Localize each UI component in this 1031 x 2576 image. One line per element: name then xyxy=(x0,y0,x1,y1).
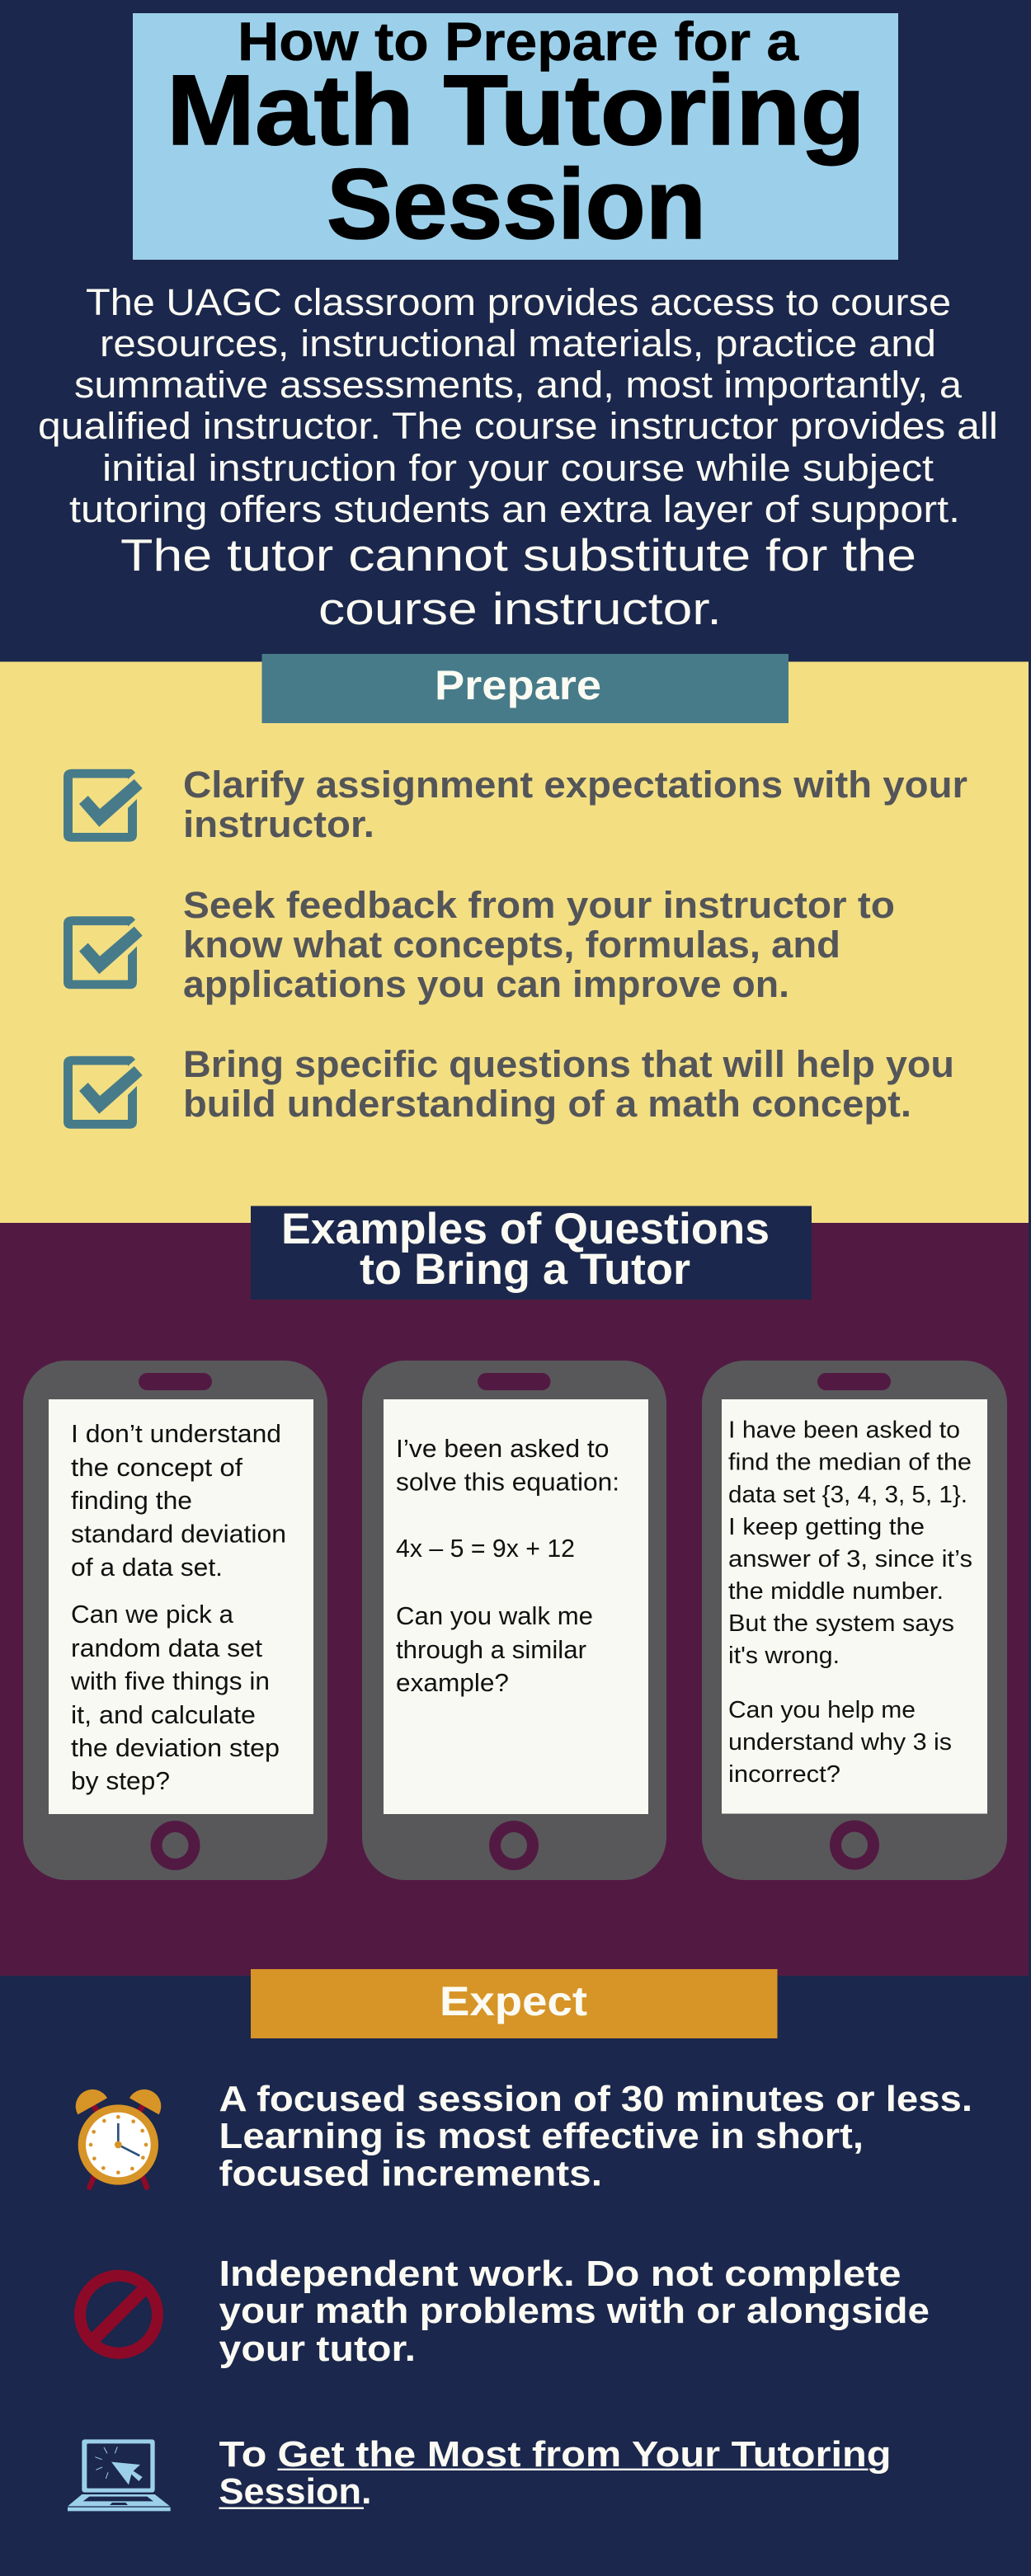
expect item 3 with link xyxy=(219,2434,891,2512)
title line 2: Math Tutoring xyxy=(167,54,865,166)
expect item 1: Learning is most effective in short, xyxy=(219,2116,864,2156)
intro paragraph: qualified instructor. The course instructor provides all xyxy=(38,405,998,447)
expect item 3 with link: Get the Most from Your Tutoring xyxy=(277,2434,891,2475)
expect item 2: your tutor. xyxy=(219,2329,416,2369)
prepare item 3: build understanding of a math concept. xyxy=(183,1083,911,1125)
phone 3 message: I have been asked to xyxy=(728,1417,960,1443)
phone 2 message: example? xyxy=(396,1668,509,1697)
intro paragraph: tutoring offers students an extra layer of support. xyxy=(69,488,960,530)
icon: checkbox 3 xyxy=(64,1056,143,1129)
expect heading: Expect xyxy=(440,1978,587,2024)
phone 3 message: But the system says xyxy=(728,1610,954,1637)
phone 1 message: of a data set. xyxy=(71,1553,223,1582)
phone 2 message: Can you walk me xyxy=(396,1601,593,1630)
phone 3 message: incorrect? xyxy=(728,1761,840,1788)
title line 3: Session xyxy=(327,148,706,260)
phone 3 message: the middle number. xyxy=(728,1578,944,1605)
phone 1 message: it, and calculate xyxy=(71,1700,256,1729)
phone 3 message: find the median of the xyxy=(728,1450,972,1476)
intro emphasis statement: course instructor. xyxy=(318,583,722,634)
phone 2 message: solve this equation: xyxy=(396,1468,619,1496)
prepare item 2: know what concepts, formulas, and xyxy=(183,924,840,966)
phone 3 xyxy=(702,1361,1007,1880)
phone 2 message: I’ve been asked to xyxy=(396,1434,609,1463)
icon: checkbox 1 xyxy=(64,769,143,842)
phone 1 message: the concept of xyxy=(71,1453,242,1482)
prepare item 1: instructor. xyxy=(183,803,374,845)
expect item 3 with link: To xyxy=(219,2434,267,2475)
prepare item 1: Clarify assignment expectations with your xyxy=(183,764,967,806)
phone 1 message xyxy=(70,1419,286,1795)
prepare item 2: applications you can improve on. xyxy=(183,963,789,1005)
prepare heading xyxy=(262,654,789,723)
phone 1 message: Can we pick a xyxy=(71,1600,234,1629)
panel: examples of questions xyxy=(0,1205,1029,1976)
intro emphasis statement xyxy=(120,529,916,634)
phone 1 message: finding the xyxy=(71,1486,192,1515)
icon: alarm clock xyxy=(76,2089,161,2188)
expect item 1: A focused session of 30 minutes or less. xyxy=(219,2079,972,2119)
icon: laptop with cursor xyxy=(68,2439,171,2511)
phone 1 message: I don’t understand xyxy=(71,1419,281,1448)
prepare item 3 xyxy=(183,1043,954,1125)
title line 1: How to Prepare for a xyxy=(238,11,799,72)
phone 2 message: through a similar xyxy=(396,1635,586,1664)
panel: prepare xyxy=(0,654,1029,1224)
phone 3 message: it's wrong. xyxy=(728,1643,840,1669)
prepare item 2: Seek feedback from your instructor to xyxy=(183,884,895,926)
phone 3 message xyxy=(728,1417,972,1788)
examples heading: to Bring a Tutor xyxy=(360,1245,690,1294)
intro paragraph: The UAGC classroom provides access to course xyxy=(86,281,951,323)
panel: expect xyxy=(68,1969,972,2512)
phone 1 message: random data set xyxy=(71,1634,262,1662)
expect heading xyxy=(251,1969,777,2038)
expect item 1 xyxy=(219,2079,972,2194)
examples heading: Examples of Questions xyxy=(281,1205,770,1253)
examples heading xyxy=(251,1205,812,1300)
expect item 1: focused increments. xyxy=(219,2154,602,2194)
phone 3 message: answer of 3, since it’s xyxy=(728,1546,972,1572)
expect item 2: your math problems with or alongside xyxy=(219,2291,930,2331)
phone 1 message: the deviation step xyxy=(71,1733,280,1762)
prepare heading: Prepare xyxy=(435,662,601,708)
expect item 2: Independent work. Do not complete xyxy=(219,2254,901,2294)
phone 3 message: data set {3, 4, 3, 5, 1}. xyxy=(728,1482,967,1508)
phone 3 message: Can you help me xyxy=(728,1697,916,1723)
phone 1 xyxy=(23,1361,327,1880)
icon: checkbox 2 xyxy=(64,916,143,989)
intro paragraph: initial instruction for your course while subject xyxy=(102,447,934,489)
panel: intro xyxy=(38,11,998,634)
prepare item 1 xyxy=(183,764,967,845)
prepare item 2 xyxy=(183,884,895,1005)
expect item 2 xyxy=(219,2254,930,2369)
phone 3 message: I keep getting the xyxy=(728,1514,925,1540)
phone 2 message: 4x – 5 = 9x + 12 xyxy=(396,1534,575,1563)
phone 1 message: with five things in xyxy=(70,1666,270,1695)
icon: prohibition sign xyxy=(80,2276,158,2353)
phone 2 message xyxy=(396,1434,619,1697)
phone 1 message: by step? xyxy=(71,1766,170,1795)
intro paragraph xyxy=(38,281,998,530)
intro emphasis statement: The tutor cannot substitute for the xyxy=(120,529,916,581)
title block xyxy=(133,11,898,260)
intro paragraph: summative assessments, and, most importantly, a xyxy=(74,364,963,406)
expect item 3 with link: Session. xyxy=(219,2471,371,2512)
phone 2 xyxy=(362,1361,666,1880)
phone 3 message: understand why 3 is xyxy=(728,1729,952,1756)
intro paragraph: resources, instructional materials, practice and xyxy=(100,322,936,364)
phone 1 message: standard deviation xyxy=(71,1519,286,1549)
prepare item 3: Bring specific questions that will help you xyxy=(183,1043,954,1085)
